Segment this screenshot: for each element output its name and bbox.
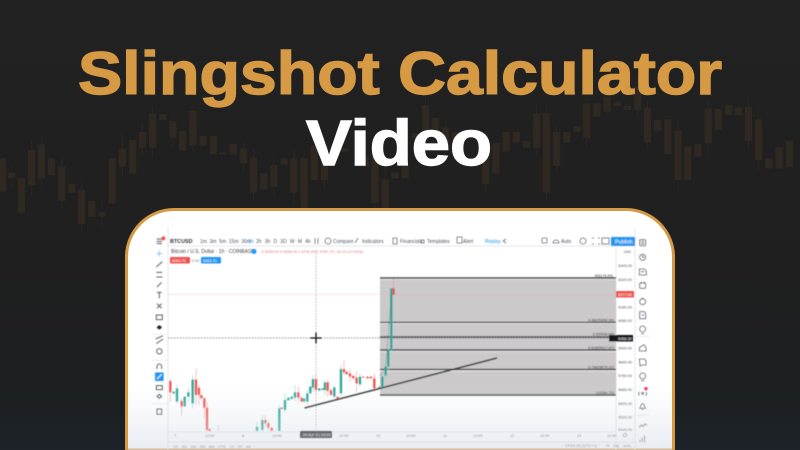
right sidebar icons	[636, 240, 649, 442]
top toolbar icons	[315, 237, 609, 244]
fibonacci zone: 0.786(5875.22)	[588, 366, 615, 370]
bottom range bar: 1D 5D 1M 3M 6M YTD 1Y 5Y All	[173, 444, 251, 449]
symbol legend: 0.00	[192, 259, 199, 263]
time axis: 12:00	[607, 434, 617, 438]
price axis labels: 5840.00	[618, 360, 632, 364]
price axis labels: 6160.00	[618, 306, 632, 310]
candlesticks	[170, 279, 394, 431]
time axis: 09 Apr '21 03:00	[303, 433, 331, 437]
background candlestick pattern	[3, 77, 789, 233]
time axis: 12	[510, 434, 514, 438]
time axis: 12:00	[406, 434, 416, 438]
time axis: 12:00	[540, 434, 550, 438]
top toolbar labels: 2h 3h D 3D W M 4h	[256, 239, 311, 245]
fibonacci zone: 0.618(5917.47)	[588, 346, 615, 350]
crosshair dotted guides	[168, 250, 616, 432]
top toolbar labels: Indicators	[362, 239, 384, 245]
crosshair price tag	[609, 335, 633, 342]
top toolbar labels: Compare	[333, 239, 354, 245]
current price tag: 6077.00	[618, 293, 632, 297]
fibonacci zone: 1(5384.75)	[596, 391, 615, 395]
time axis: 12:00	[272, 434, 282, 438]
trading chart screenshot	[128, 227, 672, 450]
time axis: 11	[443, 434, 447, 438]
bottom range bar: 15:53:25 (UTC+1)	[565, 443, 598, 448]
time axis	[174, 431, 617, 438]
top toolbar labels: Auto	[561, 239, 572, 245]
left drawing toolbar	[152, 236, 168, 414]
price axis labels: USD	[624, 250, 631, 254]
fibonacci zone: 0.382(5996.35)	[588, 318, 615, 322]
time axis: 13	[577, 434, 581, 438]
price axis labels: 5600.00	[618, 402, 632, 406]
current price tag	[616, 291, 634, 298]
price axis labels: 5680.00	[618, 388, 632, 392]
symbol legend: 6063.70	[172, 259, 186, 263]
price axis labels: 5760.00	[618, 374, 632, 378]
symbol legend	[170, 249, 364, 264]
time axis: 12:00	[339, 434, 349, 438]
bottom fade over screenshot	[128, 385, 672, 450]
top toolbar labels: 1m 3m 5m 15m 30m	[200, 239, 251, 245]
top toolbar labels	[170, 239, 572, 245]
bottom range bar	[173, 444, 631, 448]
bottom range bar: % log auto	[606, 443, 632, 448]
top toolbar labels: BTCUSD	[170, 239, 193, 245]
crosshair price tag: 5958.30	[618, 337, 632, 341]
top toolbar labels: Replay	[485, 239, 501, 245]
time axis: 10	[376, 434, 380, 438]
top toolbar labels: Templates	[427, 239, 450, 245]
time axis: 12:00	[473, 434, 483, 438]
publish button: Publish	[615, 240, 633, 246]
price axis labels: 6320.00	[618, 278, 632, 282]
symbol legend: O 6059.00 H 6095.00 L 5794.49 C 5787.79 +31.21 (+0.53%)	[261, 250, 364, 254]
top toolbar labels: 1h	[248, 239, 254, 245]
price axis labels: 5440.00	[618, 428, 632, 432]
trend line	[304, 358, 497, 408]
price axis labels	[618, 250, 632, 432]
title: Video: Video	[306, 107, 492, 179]
time axis: 7	[174, 434, 176, 438]
publish button	[611, 237, 635, 246]
price axis labels: 6080.00	[618, 319, 632, 323]
time axis: 8	[242, 434, 244, 438]
price axis labels: 6400.00	[618, 264, 632, 268]
chart grid lines	[167, 227, 635, 450]
fibonacci zone: 0.5(5956.88)	[592, 332, 615, 336]
fibonacci zone	[380, 274, 616, 395]
crosshair cursor	[310, 332, 322, 344]
video card frame	[126, 209, 674, 450]
symbol legend: 6063.70	[203, 259, 217, 263]
price axis labels: 5520.00	[618, 416, 632, 420]
symbol legend: Bitcoin / U.S. Dollar · 1h · COINBASE	[171, 249, 255, 255]
top toolbar labels: Financials	[400, 239, 423, 245]
time axis: 12:00	[205, 434, 215, 438]
top toolbar labels: Alert	[463, 239, 474, 245]
title: Slingshot Calculator: Slingshot Calculator	[78, 40, 722, 107]
price axis labels: 5920.00	[618, 346, 632, 350]
fibonacci zone: 0(6175.00)	[595, 274, 614, 278]
